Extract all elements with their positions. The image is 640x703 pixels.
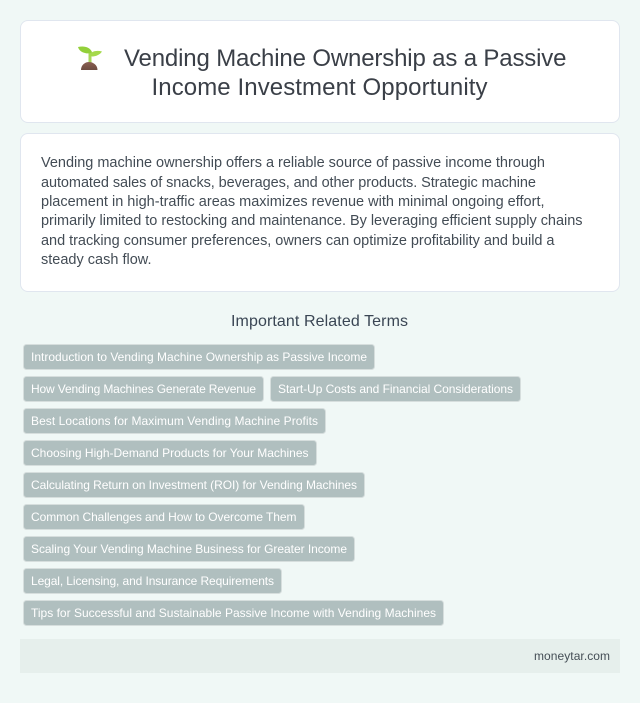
title text — [124, 45, 566, 101]
panel: title card — [20, 20, 620, 123]
panel: description — [20, 133, 620, 292]
title text: Vending Machine Ownership as a Passive — [124, 45, 566, 72]
description text: and tracking consumer preferences, owners can optimize profitability and build a — [41, 233, 555, 249]
tag 4: Best Locations for Maximum Vending Machine Profits — [31, 414, 318, 428]
tag 1 — [24, 344, 374, 370]
tag 7 — [24, 504, 304, 530]
heading: important related terms: Important Related Terms — [231, 313, 408, 330]
tag 3 — [270, 376, 520, 402]
tag 2: How Vending Machines Generate Revenue — [31, 382, 256, 396]
tag 6: Calculating Return on Investment (ROI) for Vending Machines — [31, 478, 357, 492]
description text: steady cash flow. — [41, 252, 152, 268]
description text — [41, 155, 582, 268]
tag 5: Choosing High-Demand Products for Your Machines — [31, 446, 308, 460]
tag 3: Start-Up Costs and Financial Considerations — [278, 382, 513, 396]
tag 8 — [24, 536, 354, 562]
tag 6 — [24, 472, 364, 498]
title content — [78, 45, 566, 101]
tags list — [23, 344, 521, 626]
tag 1: Introduction to Vending Machine Ownership as Passive Income — [31, 350, 367, 364]
description text: primarily limited to restocking and maintenance. By leveraging efficient supply chains — [41, 213, 582, 229]
description text: Vending machine ownership offers a reliable source of passive income through — [41, 155, 545, 171]
tag 4 — [24, 408, 326, 434]
description text: automated sales of snacks, beverages, and other products. Strategic machine — [41, 175, 536, 191]
footer text: moneytar.com — [534, 649, 610, 663]
description text: placement in high-traffic areas maximizes revenue with minimal ongoing effort, — [41, 194, 544, 210]
title text: Income Investment Opportunity — [152, 74, 488, 101]
tag 10 — [24, 600, 444, 626]
icon: seedling — [78, 46, 102, 70]
tag 9 — [24, 568, 282, 594]
footer bar — [20, 639, 620, 673]
tag 7: Common Challenges and How to Overcome Them — [31, 510, 296, 524]
tag 2 — [24, 376, 264, 402]
tag 9: Legal, Licensing, and Insurance Requirements — [31, 574, 274, 588]
tag 5 — [24, 440, 316, 466]
tag 8: Scaling Your Vending Machine Business for Greater Income — [31, 542, 347, 556]
tag 10: Tips for Successful and Sustainable Passive Income with Vending Machines — [31, 606, 436, 620]
